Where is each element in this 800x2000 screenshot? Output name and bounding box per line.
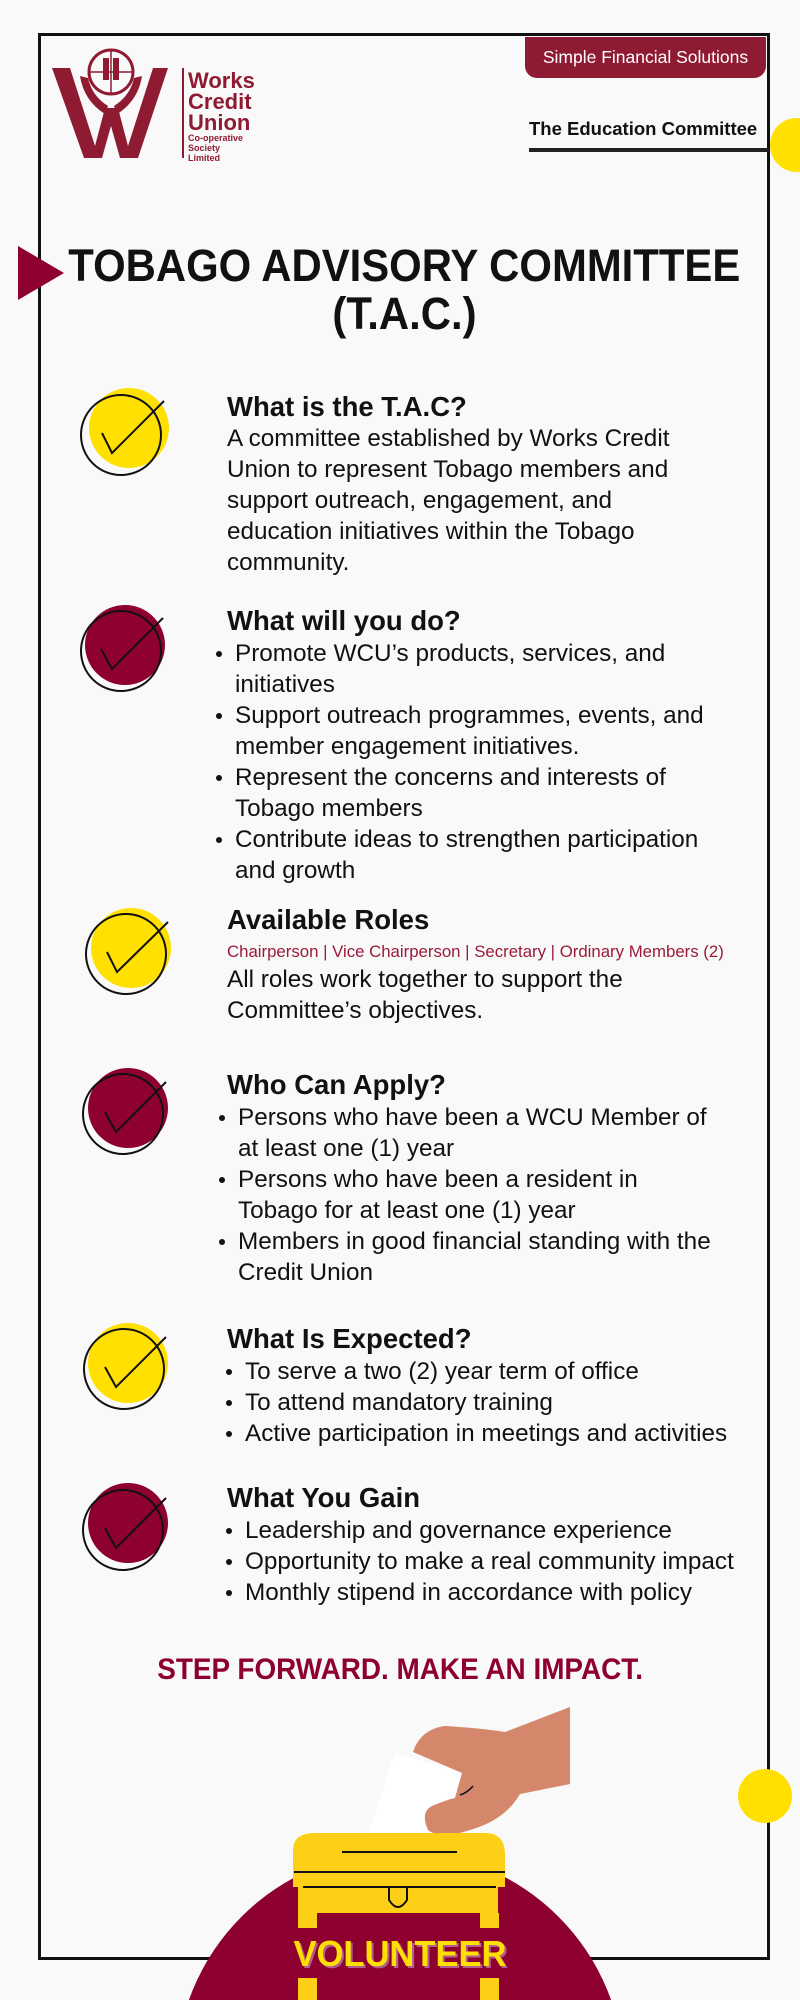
icon 1	[80, 388, 169, 476]
icon 6	[82, 1483, 168, 1571]
bullets: Promote WCU’s products, services, and	[235, 640, 665, 667]
body: community.	[227, 549, 349, 576]
bullets: To serve a two (2) year term of office	[245, 1358, 639, 1385]
body: education initiatives within the Tobago	[227, 518, 634, 545]
bullets: Leadership and governance experience	[245, 1517, 672, 1544]
bullets: Persons who have been a resident in	[238, 1166, 638, 1193]
bullets: Tobago for at least one (1) year	[238, 1197, 576, 1224]
section 6	[226, 1482, 734, 1606]
body	[227, 425, 670, 576]
education committee label: The Education Committee	[529, 118, 757, 139]
illustration: ballot box with hand	[189, 1707, 611, 2000]
icon 5	[83, 1323, 168, 1410]
logo: Credit	[188, 89, 252, 114]
body	[227, 966, 623, 1024]
maroon arc	[176, 1851, 624, 2000]
logo	[52, 48, 255, 162]
body: All roles work together to support the	[227, 966, 623, 993]
title	[68, 240, 740, 339]
section 2	[216, 605, 704, 884]
ballot paper	[363, 1753, 462, 1850]
body: Committee’s objectives.	[227, 997, 483, 1024]
logo: Union	[188, 110, 250, 135]
bullets: Active participation in meetings and activities	[245, 1420, 727, 1447]
body: support outreach, engagement, and	[227, 487, 612, 514]
logo: Co-operative	[188, 133, 243, 143]
bullets: To attend mandatory training	[245, 1389, 553, 1416]
icon 2	[80, 605, 165, 692]
roles line: Chairperson | Vice Chairperson | Secretary | Ordinary Members (2)	[227, 942, 724, 961]
bullets: Opportunity to make a real community impact	[245, 1548, 734, 1575]
heading: What is the T.A.C?	[227, 391, 467, 422]
title triangle	[18, 246, 64, 300]
title: TOBAGO ADVISORY COMMITTEE	[68, 240, 740, 291]
body: Union to represent Tobago members and	[227, 456, 668, 483]
education committee label	[529, 118, 769, 152]
tab: simple financial solutions: Simple Financial Solutions	[543, 47, 748, 67]
call to action: STEP FORWARD. MAKE AN IMPACT.	[157, 1653, 643, 1686]
bullets	[216, 640, 704, 884]
heading: Who Can Apply?	[227, 1069, 446, 1100]
lid	[293, 1833, 505, 1887]
section 5	[226, 1323, 727, 1447]
body: A committee established by Works Credit	[227, 425, 669, 452]
logo: Society	[188, 143, 220, 153]
bullets: member engagement initiatives.	[235, 733, 579, 760]
bullets: Support outreach programmes, events, and	[235, 702, 704, 729]
volunteer text: VOLUNTEER	[295, 1936, 509, 1976]
yellow dot bottom	[738, 1769, 792, 1823]
bullets: Represent the concerns and interests of	[235, 764, 666, 791]
bullets: initiatives	[235, 671, 335, 698]
heading: What You Gain	[227, 1482, 420, 1513]
heading: What Is Expected?	[227, 1323, 472, 1354]
bullets: Tobago members	[235, 795, 423, 822]
section 1	[227, 391, 670, 576]
tab: simple financial solutions	[525, 37, 766, 78]
heading: Available Roles	[227, 904, 429, 935]
bullets: Persons who have been a WCU Member of	[238, 1104, 707, 1131]
bullets	[219, 1104, 711, 1286]
bullets: Monthly stipend in accordance with policy	[245, 1579, 692, 1606]
section 4	[219, 1069, 711, 1286]
bullets	[226, 1517, 734, 1606]
bullets	[226, 1358, 727, 1447]
icon 4	[82, 1068, 168, 1155]
icon 3	[85, 908, 171, 995]
bullets: Contribute ideas to strengthen participation	[235, 826, 698, 853]
hand	[413, 1707, 570, 1835]
bullets: Members in good financial standing with the	[238, 1228, 711, 1255]
illustration: ballot box with hand: VOLUNTEER	[293, 1934, 507, 1974]
logo: Works	[188, 68, 255, 93]
heading: What will you do?	[227, 605, 461, 636]
bullets: and growth	[235, 857, 355, 884]
bullets: at least one (1) year	[238, 1135, 454, 1162]
section 3	[227, 904, 724, 1024]
yellow dot top	[770, 118, 800, 172]
title: (T.A.C.)	[332, 288, 476, 339]
bullets: Credit Union	[238, 1259, 373, 1286]
